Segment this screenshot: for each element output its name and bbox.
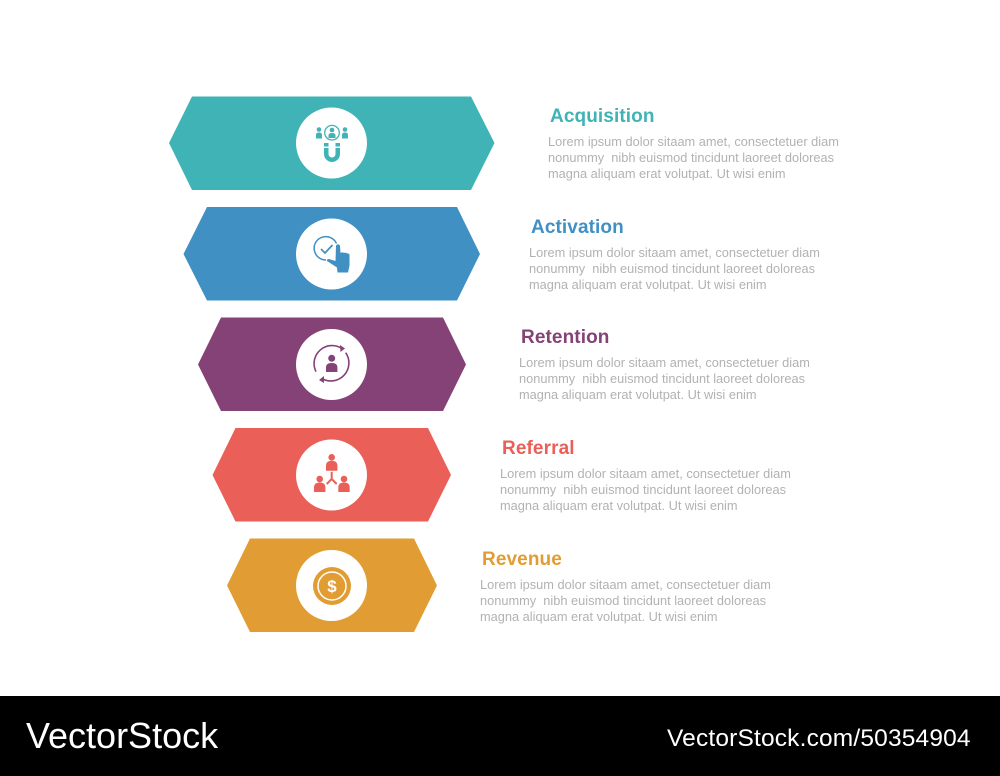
- band: revenue: [227, 538, 437, 632]
- icon: check and pointing hand: [314, 237, 350, 272]
- icon: dollar coin: [313, 567, 351, 605]
- text block: acquisition: [548, 106, 839, 181]
- icon: person in cycle arrows: [314, 345, 349, 383]
- heading: activation: Activation: [531, 216, 624, 238]
- icon: people and magnet: [316, 125, 348, 162]
- band: referral: [212, 428, 451, 522]
- body text: activation: Lorem ipsum dolor sitaam amet, consectetuer diam nonummy nibh euismod tincidunt laoreet doloreas magna aliquam erat volutpat. Ut wisi enim: [529, 244, 820, 292]
- body text: acquisition: Lorem ipsum dolor sitaam amet, consectetuer diam nonummy nibh euismod tincidunt laoreet doloreas magna aliquam erat volutpat. Ut wisi enim: [548, 134, 839, 181]
- text block: referral: [500, 438, 791, 513]
- footer bar: [0, 696, 1000, 776]
- icon: referral network: [314, 454, 350, 492]
- band: activation: [184, 207, 480, 300]
- heading: retention: Retention: [521, 327, 610, 348]
- text block: retention: [519, 327, 810, 402]
- heading: revenue: Revenue: [482, 548, 562, 570]
- text block: revenue: [480, 548, 771, 624]
- band: retention: [198, 318, 466, 411]
- body text: retention: Lorem ipsum dolor sitaam amet, consectetuer diam nonummy nibh euismod tincidunt laoreet doloreas magna aliquam erat volutpat. Ut wisi enim: [519, 355, 810, 402]
- band: acquisition: [169, 96, 494, 190]
- body text: revenue: Lorem ipsum dolor sitaam amet, consectetuer diam nonummy nibh euismod tincidunt laoreet doloreas magna aliquam erat volutpat. Ut wisi enim: [480, 576, 771, 624]
- footer url text: VectorStock.com/50354904: [667, 725, 971, 752]
- heading: referral: Referral: [502, 438, 575, 458]
- icon: dollar coin: $: [327, 577, 337, 596]
- body text: referral: Lorem ipsum dolor sitaam amet, consectetuer diam nonummy nibh euismod tincidunt laoreet doloreas magna aliquam erat volutpat. Ut wisi enim: [500, 466, 791, 513]
- footer logo text: VectorStock: [26, 715, 218, 756]
- text block: activation: [529, 216, 820, 292]
- heading: acquisition: Acquisition: [550, 106, 655, 126]
